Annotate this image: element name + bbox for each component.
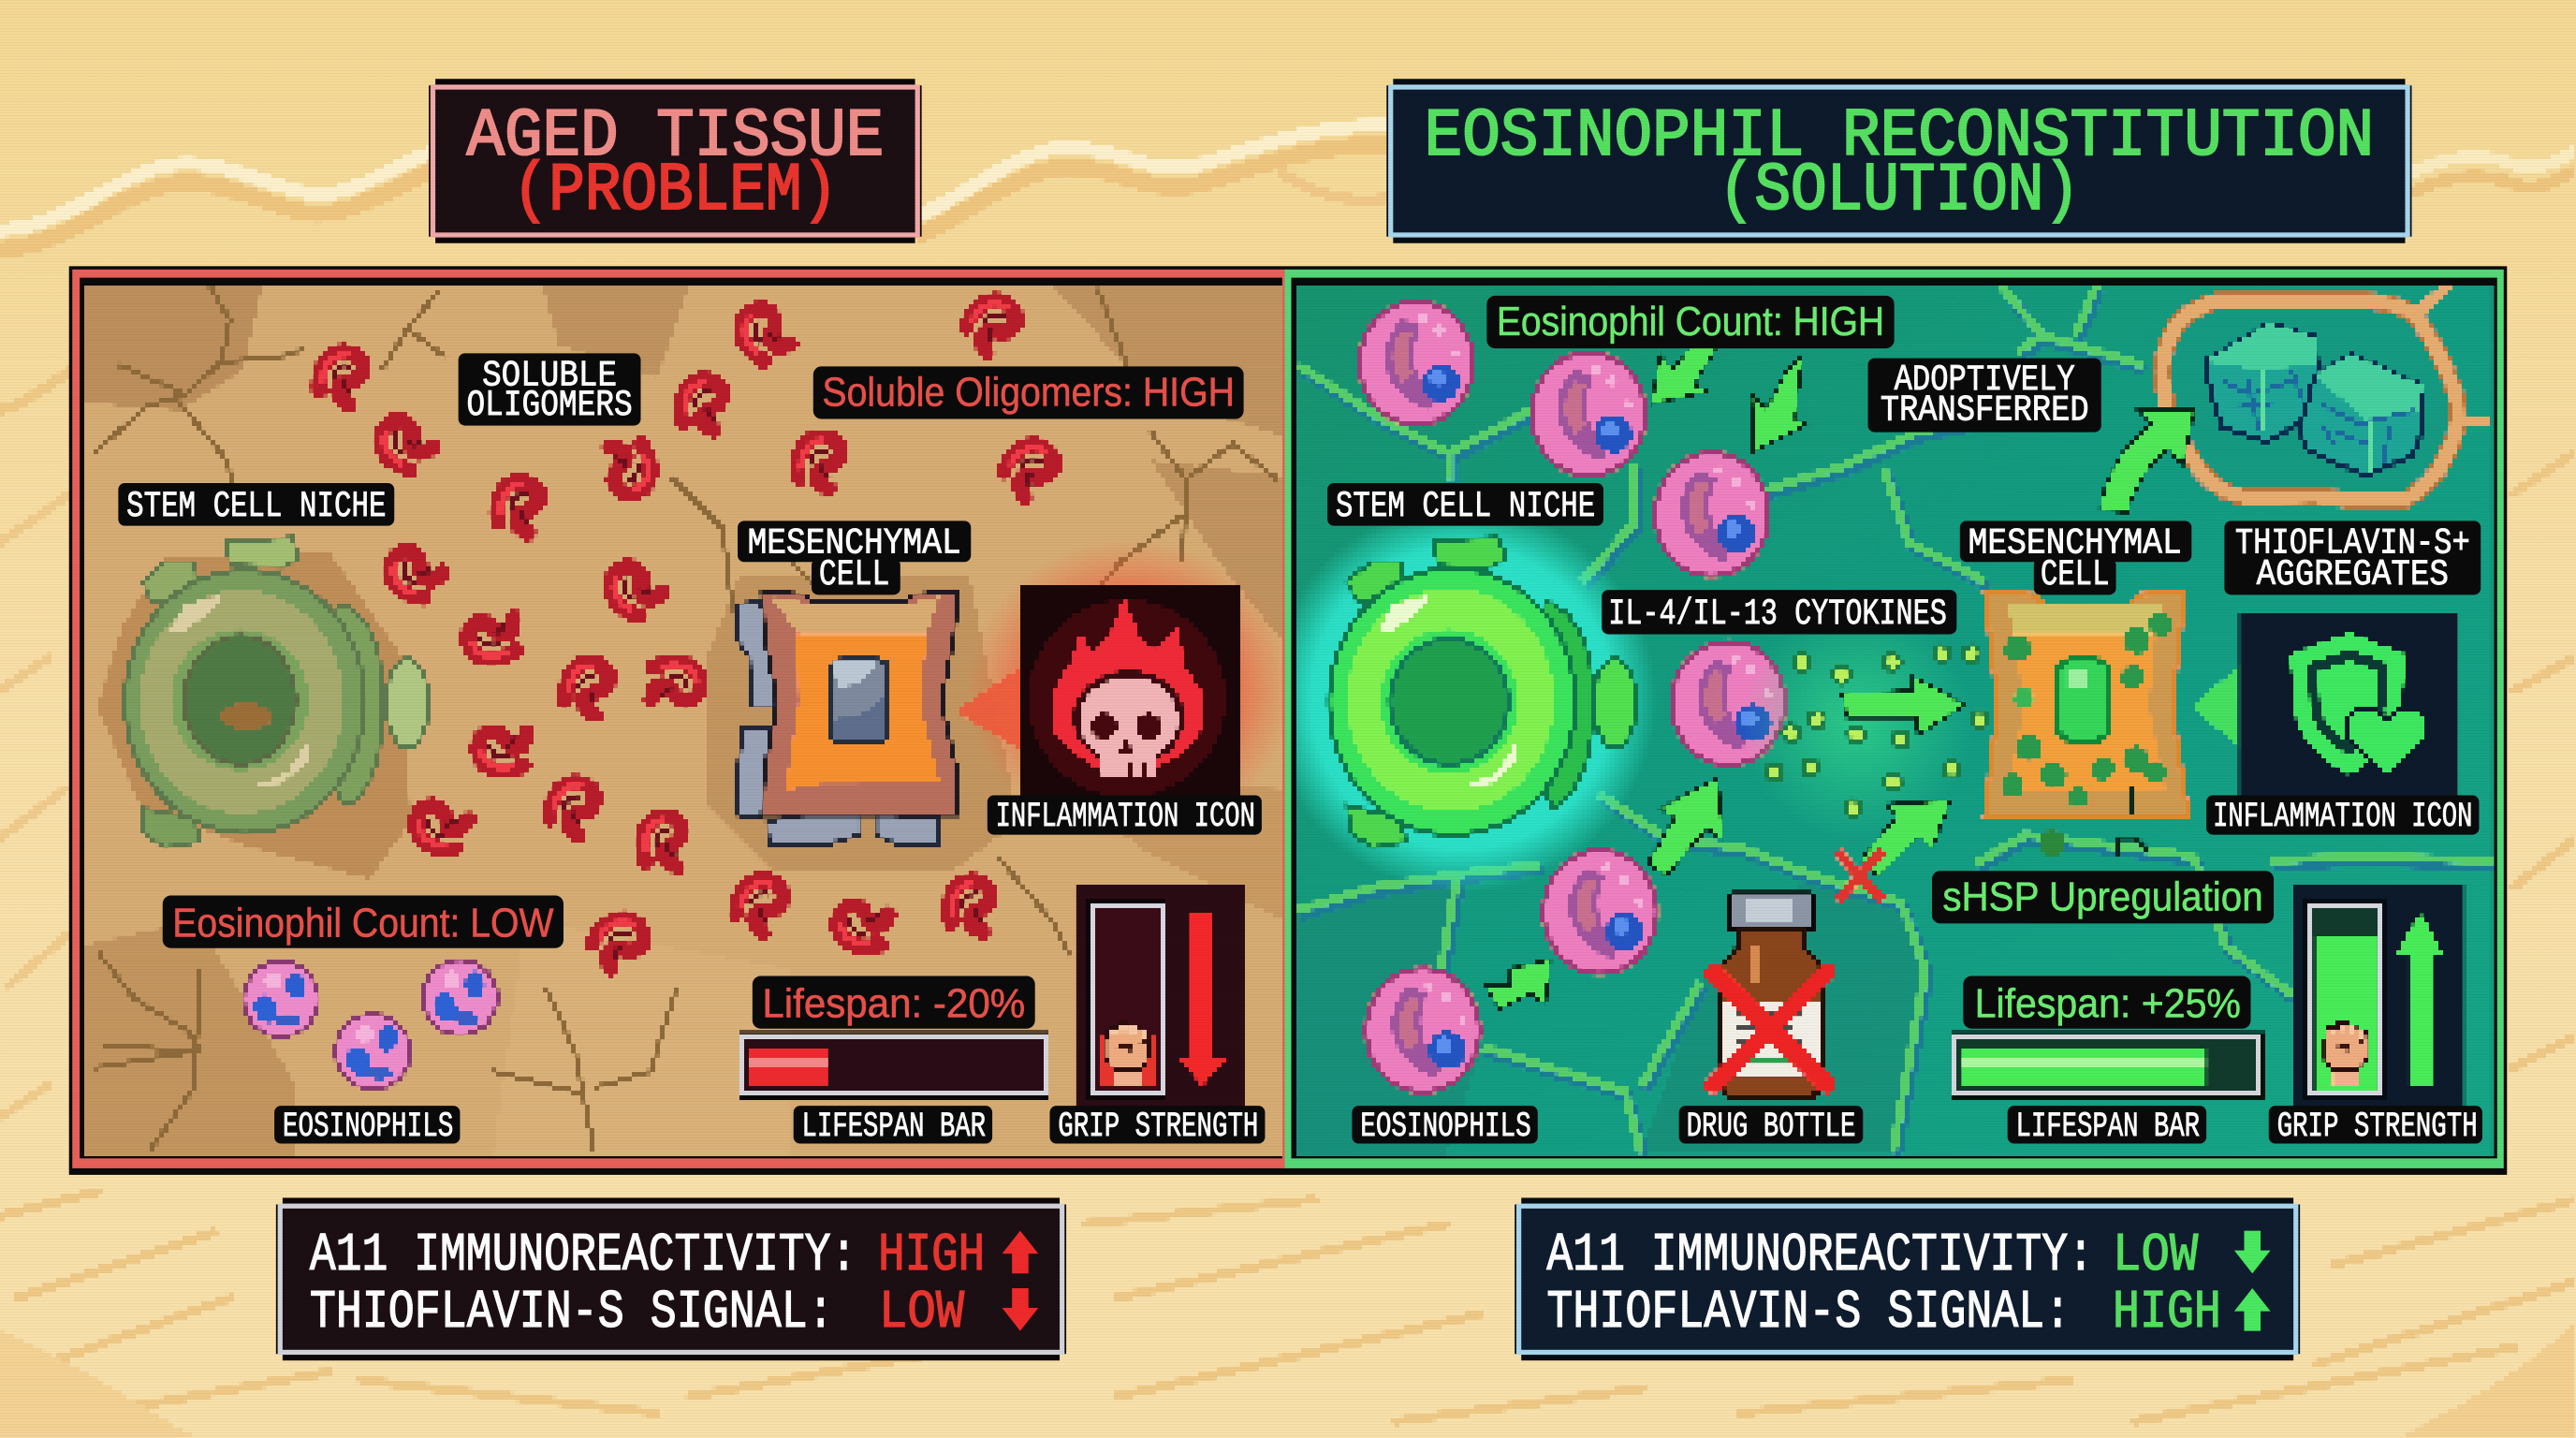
label: thioflavin aggregates: THIOFLAVIN-S+ bbox=[2235, 523, 2470, 565]
arrow: down bbox=[1003, 1288, 1038, 1331]
grip strength meter: down bbox=[1075, 886, 1245, 1110]
thioflavin aggregates bbox=[2162, 285, 2491, 500]
stat: lifespan minus 20 percent: Lifespan: -20% bbox=[762, 980, 1025, 1026]
label: inflammation icon: INFLAMMATION ICON bbox=[2213, 798, 2472, 837]
label: stem cell niche: STEM CELL NICHE bbox=[126, 486, 386, 527]
grip strength meter: up bbox=[2291, 886, 2465, 1110]
stat: shsp upregulation: sHSP Upregulation bbox=[1942, 873, 2263, 919]
arrow: up bbox=[1003, 1231, 1038, 1273]
labels: reconstitution panel bbox=[1327, 296, 2482, 1147]
labels: aged tissue panel bbox=[118, 353, 1265, 1147]
label: eosinophils: EOSINOPHILS bbox=[1360, 1108, 1531, 1147]
readout: reconstitution markers bbox=[1515, 1197, 2300, 1360]
label: adoptively transferred: ADOPTIVELY bbox=[1895, 360, 2075, 401]
label: drug bottle: DRUG BOTTLE bbox=[1687, 1108, 1855, 1147]
label: cytokines: IL-4/IL-13 CYTOKINES bbox=[1608, 594, 1947, 635]
icon: shield with heart bbox=[2191, 614, 2459, 795]
red cross on arrow bbox=[1837, 851, 1882, 901]
label: thioflavin aggregates: AGGREGATES bbox=[2257, 554, 2449, 595]
label: grip strength: GRIP STRENGTH bbox=[1058, 1108, 1258, 1147]
eosinophils (many) bbox=[1357, 299, 1788, 1094]
readout: aged tissue markers bbox=[276, 1197, 1066, 1360]
readout: reconstitution markers: THIOFLAVIN-S SIGNAL: bbox=[1546, 1283, 2071, 1343]
label: mesenchymal cell: MESENCHYMAL bbox=[748, 523, 961, 565]
mesenchymal cell (dull) bbox=[738, 592, 958, 846]
stem cell niche (healthy) bbox=[1296, 526, 1652, 889]
readout: reconstitution markers: A11 IMMUNOREACTIVITY: bbox=[1546, 1225, 2094, 1286]
stat: soluble oligomers high: Soluble Oligomers: HIGH bbox=[822, 370, 1235, 416]
eosinophils (few) bbox=[242, 958, 500, 1091]
panel: aged tissue artwork bbox=[85, 285, 1295, 1157]
stat: lifespan plus 25 percent: Lifespan: +25% bbox=[1975, 980, 2241, 1026]
label: soluble oligomers bbox=[459, 353, 640, 426]
label: eosinophils: EOSINOPHILS bbox=[283, 1108, 453, 1147]
label: adoptively transferred bbox=[1868, 359, 2101, 433]
label: thioflavin aggregates bbox=[2224, 521, 2481, 595]
stat: eosinophil count low: Eosinophil Count: LOW bbox=[172, 900, 554, 946]
label: mesenchymal cell bbox=[738, 521, 971, 595]
heading: aged tissue (problem) bbox=[429, 79, 922, 243]
label: lifespan bar: LIFESPAN BAR bbox=[801, 1108, 986, 1147]
panel: eosinophil reconstitution artwork bbox=[1268, 285, 2497, 1158]
label: grip strength: GRIP STRENGTH bbox=[2277, 1108, 2478, 1147]
stat: eosinophil count high: Eosinophil Count: HIGH bbox=[1497, 299, 1884, 345]
heading: eosinophil reconstitution (solution): EOSINOPHIL RECONSTITUTION bbox=[1425, 98, 2374, 175]
icon: flaming skull bbox=[1019, 585, 1239, 797]
readout: aged tissue markers: LOW bbox=[879, 1283, 964, 1343]
label: soluble oligomers: OLIGOMERS bbox=[466, 385, 633, 426]
readout: aged tissue markers: A11 IMMUNOREACTIVITY: bbox=[310, 1225, 856, 1286]
heading: eosinophil reconstitution (solution): (SOLUTION) bbox=[1719, 153, 2080, 229]
label: soluble oligomers: SOLUBLE bbox=[482, 356, 617, 397]
label: mesenchymal cell: MESENCHYMAL bbox=[1969, 523, 2182, 565]
label: lifespan bar: LIFESPAN BAR bbox=[2016, 1108, 2200, 1147]
mesenchymal cell (healthy) bbox=[1984, 592, 2188, 858]
icon: drug bottle crossed out bbox=[1714, 894, 1827, 1097]
stem cell niche (dull) bbox=[97, 537, 429, 879]
heading: aged tissue (problem): AGED TISSUE bbox=[466, 98, 884, 175]
label: adoptively transferred: TRANSFERRED bbox=[1881, 389, 2089, 431]
arrow: down bbox=[2234, 1231, 2271, 1273]
lifespan bar: plus twenty-five bbox=[1950, 1032, 2264, 1099]
main comparison frame bbox=[69, 266, 2507, 1175]
icon: inflammation glow bbox=[959, 548, 1282, 786]
label: stem cell niche: STEM CELL NICHE bbox=[1336, 486, 1595, 527]
readout: aged tissue markers: HIGH bbox=[878, 1225, 985, 1286]
label: mesenchymal cell: CELL bbox=[2041, 554, 2110, 595]
arrows: eosinophil migration bbox=[1486, 346, 2193, 1007]
oligomer cluster bbox=[316, 291, 1060, 974]
heading: eosinophil reconstitution (solution) bbox=[1386, 79, 2411, 243]
readout: aged tissue markers: THIOFLAVIN-S SIGNAL: bbox=[310, 1283, 834, 1343]
readout: reconstitution markers: LOW bbox=[2113, 1225, 2199, 1286]
label: inflammation icon: INFLAMMATION ICON bbox=[996, 798, 1255, 837]
lifespan bar: minus twenty bbox=[738, 1032, 1050, 1099]
heading: aged tissue (problem): (PROBLEM) bbox=[513, 153, 838, 229]
readout: reconstitution markers: HIGH bbox=[2113, 1283, 2221, 1343]
arrow: up bbox=[2234, 1288, 2271, 1331]
label: mesenchymal cell: CELL bbox=[819, 554, 889, 595]
label: mesenchymal cell bbox=[1960, 521, 2191, 595]
cytokine particles bbox=[1741, 608, 1990, 838]
